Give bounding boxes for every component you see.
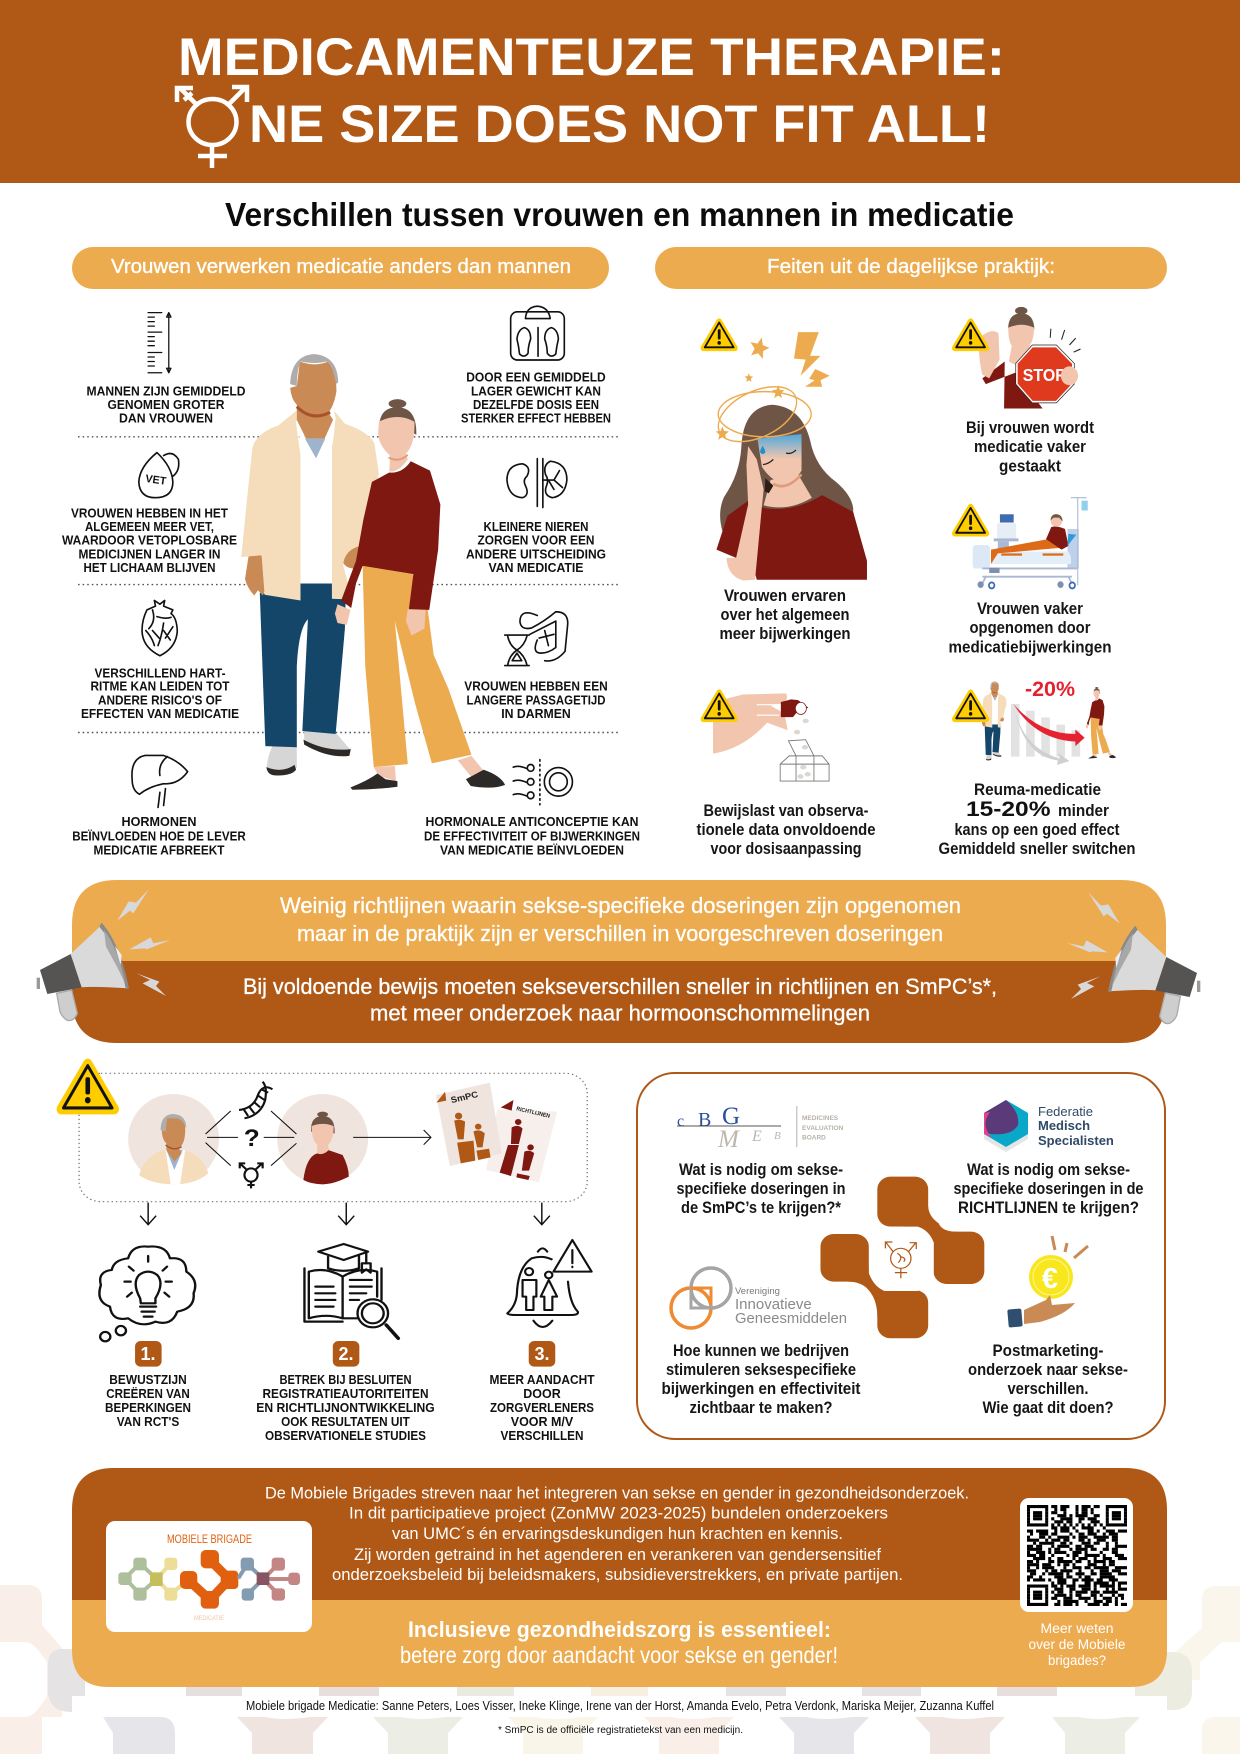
text: evidence: voor dosisaanpassing xyxy=(710,840,862,858)
text: side effects: Vrouwen ervaren xyxy=(724,587,846,605)
text: weight: DOOR EEN GEMIDDELD xyxy=(466,369,606,384)
text: question SmPC: Wat is nodig om sekse- xyxy=(679,1160,843,1179)
text: kidneys: ZORGEN VOOR EEN xyxy=(478,532,594,547)
text: kidneys: KLEINERE NIEREN xyxy=(484,519,588,534)
warning icons xyxy=(703,321,986,719)
header banner xyxy=(0,0,1240,183)
text: stopped: gestaakt xyxy=(999,457,1061,475)
text: step 2: REGISTRATIEAUTORITEITEN xyxy=(262,1386,428,1401)
text: step 2: OBSERVATIONELE STUDIES xyxy=(265,1428,426,1443)
text: admitted: Vrouwen vaker xyxy=(977,600,1084,618)
text: reuma: kans op een goed effect xyxy=(954,821,1120,839)
panel: stakeholders xyxy=(637,1073,1165,1439)
text: QR caption: Meer weten xyxy=(1040,1620,1114,1636)
badge numbers: 2. xyxy=(338,1344,354,1364)
panel: left column illustrations xyxy=(132,306,572,807)
illustration: hand dropping pills xyxy=(713,693,829,781)
text: stopped: Bij vrouwen wordt xyxy=(966,419,1094,437)
text: step 1: BEWUSTZIJN xyxy=(109,1372,187,1387)
icon: heart xyxy=(142,600,177,656)
text: question companies: zichtbaar te maken? xyxy=(690,1398,832,1417)
text: intro: onderzoeksbeleid bij beleidsmakers, subsidieverstrekkers, en private partijen. xyxy=(332,1565,903,1584)
avatar: man xyxy=(128,1094,219,1184)
text: contraception: DE EFFECTIVITEIT OF BIJWERKINGEN xyxy=(424,828,640,844)
QR code xyxy=(1020,1498,1133,1612)
text: weight xyxy=(461,369,611,426)
text: height xyxy=(86,383,246,426)
panel: right column illustrations xyxy=(711,307,1116,781)
text: QR caption: over de Mobiele xyxy=(1028,1636,1126,1652)
text: kidneys: VAN MEDICATIE xyxy=(488,560,584,575)
dotted dividers xyxy=(78,437,620,732)
text: question companies: bijwerkingen en effectiviteit xyxy=(662,1379,861,1398)
text: liver: MEDICATIE AFBREEKT xyxy=(94,842,225,858)
text: admitted: opgenomen door xyxy=(970,619,1091,637)
icon: fat drop: VET xyxy=(145,473,167,488)
icon: gender symbol xyxy=(177,87,247,168)
text: step 3: MEER AANDACHT xyxy=(490,1372,595,1387)
text: admitted xyxy=(948,600,1112,656)
text: question postmarketing: Wie gaat dit doen? xyxy=(982,1398,1114,1417)
logo: Federatie Medisch Specialisten: Specialisten xyxy=(1038,1133,1114,1148)
text: contraception: VAN MEDICATIE BEÏNVLOEDEN xyxy=(440,842,624,858)
text: question guidelines xyxy=(954,1160,1144,1217)
text: height: DAN VROUWEN xyxy=(119,410,213,426)
text: heart: ANDERE RISICO'S OF xyxy=(98,692,222,707)
text: intro xyxy=(265,1484,969,1584)
text: kidneys: ANDERE UITSCHEIDING xyxy=(466,546,606,561)
icon: thought bubble xyxy=(99,1246,195,1341)
docs: SmPC and guidelines: RICHTLIJNEN xyxy=(515,1106,550,1120)
icon: megaphone right xyxy=(1067,892,1200,1024)
text: question guidelines: specifieke doseringen in de xyxy=(954,1179,1144,1198)
icon: kidneys xyxy=(507,459,567,508)
text: question guidelines: RICHTLIJNEN te krijgen? xyxy=(958,1198,1139,1217)
white footer strip xyxy=(72,1696,1167,1717)
text: step 3: ZORGVERLENERS xyxy=(490,1400,594,1415)
illustration: stop sign woman xyxy=(979,307,1080,409)
text: fat: WAARDOOR VETOPLOSBARE xyxy=(62,532,237,547)
text: side effects: meer bijwerkingen xyxy=(720,625,850,643)
logo: CBG MEB: B xyxy=(698,1109,711,1131)
dotted frame xyxy=(79,1073,587,1202)
illustration: stop sign woman: STOP xyxy=(1023,365,1066,385)
text: fat: ALGEMEEN MEER VET, xyxy=(85,519,214,534)
connector lines xyxy=(206,1111,431,1166)
figure: woman xyxy=(335,399,505,790)
text: guideline bottom xyxy=(243,974,997,1026)
text: step 2: BETREK BIJ BESLUITEN xyxy=(280,1372,412,1387)
pill heading: right: Feiten uit de dagelijkse praktijk: xyxy=(767,256,1055,278)
icon: coin in hand: € xyxy=(1042,1263,1058,1295)
logo: CBG MEB: B xyxy=(774,1130,781,1142)
panel: guideline banner xyxy=(72,880,1166,1043)
logo: CBG MEB xyxy=(677,1103,844,1153)
text: intro: Zij worden getraind in het agenderen en verankeren van gendersensitief xyxy=(354,1545,881,1564)
logo: Federatie Medisch Specialisten: Federatie xyxy=(1038,1104,1093,1119)
text: reuma: Gemiddeld sneller switchen xyxy=(938,840,1136,858)
text: step 2: OOK RESULTATEN UIT xyxy=(281,1414,410,1429)
main heading: Verschillen tussen vrouwen en mannen in medicatie xyxy=(225,196,1014,233)
arrows down xyxy=(140,1203,550,1225)
text: question SmPC xyxy=(676,1160,846,1217)
text: intestines: VROUWEN HEBBEN EEN xyxy=(464,678,608,693)
text: intro: De Mobiele Brigades streven naar het integreren van sekse en gender in gezondheidsonderzoek. xyxy=(265,1484,969,1503)
logo: Federatie Medisch Specialisten: Medisch xyxy=(1038,1118,1090,1133)
text: evidence: tionele data onvoldoende xyxy=(696,821,876,839)
logo: Federatie Medisch Specialisten xyxy=(984,1100,1114,1152)
text: heart: RITME KAN LEIDEN TOT xyxy=(90,678,230,693)
text: step 2: EN RICHTLIJNONTWIKKELING xyxy=(256,1400,435,1415)
text: question guidelines: Wat is nodig om sekse- xyxy=(967,1160,1130,1179)
text: step 1: CREËREN VAN xyxy=(106,1386,190,1401)
text: side effects: over het algemeen xyxy=(720,606,850,624)
text: conclusion: betere zorg door aandacht voor sekse en gender! xyxy=(400,1642,838,1668)
text: contraception xyxy=(424,814,640,858)
icon: fat drop xyxy=(139,453,179,498)
text: conclusion: Inclusieve gezondheidszorg is essentieel: xyxy=(408,1617,831,1642)
text: side effects xyxy=(720,587,850,643)
text: reuma xyxy=(938,781,1136,858)
text: step 3: VERSCHILLEN xyxy=(500,1428,584,1443)
text: liver: HORMONEN xyxy=(122,814,196,829)
logo card: Mobiele Brigade xyxy=(106,1521,312,1632)
text: weight: DEZELFDE DOSIS EEN xyxy=(473,397,599,412)
badge numbers: 3. xyxy=(534,1344,550,1364)
text: question postmarketing: onderzoek naar sekse- xyxy=(968,1360,1128,1379)
logo: CBG MEB: M xyxy=(717,1126,740,1153)
text: QR caption xyxy=(1028,1620,1126,1668)
warning icon large xyxy=(61,1064,114,1109)
icon: book and magnifier xyxy=(304,1244,398,1338)
icon: liver xyxy=(132,755,188,807)
text: liver: BEÏNVLOEDEN HOE DE LEVER xyxy=(72,828,246,844)
text: intro: In dit participatieve project (ZonMW 2023-2025) bundelen onderzoekers xyxy=(349,1504,888,1523)
icon: DNA xyxy=(239,1082,272,1118)
text: step 1: BEPERKINGEN xyxy=(105,1400,191,1415)
icon: question mark: ? xyxy=(244,1125,260,1152)
text: step 3: DOOR xyxy=(523,1386,561,1401)
pill heading: left: Vrouwen verwerken medicatie anders dan mannen xyxy=(111,256,571,278)
text: step 3 xyxy=(490,1372,595,1443)
icon: scale xyxy=(511,306,564,360)
text: question companies xyxy=(662,1341,861,1417)
logo: CBG MEB: c xyxy=(677,1113,684,1130)
logo: CBG MEB: G xyxy=(722,1103,740,1130)
logo: CBG MEB: MEDICINES xyxy=(802,1115,839,1122)
badge numbers xyxy=(140,1344,550,1364)
icon: megaphone left xyxy=(37,889,170,1021)
text: heart: VERSCHILLEND HART- xyxy=(94,666,226,681)
title line 2: NE SIZE DOES NOT FIT ALL! xyxy=(249,95,990,154)
avatar: woman xyxy=(277,1094,368,1184)
text: question postmarketing: verschillen. xyxy=(1008,1379,1088,1398)
text: stopped xyxy=(966,419,1094,475)
icon: coin in hand xyxy=(1007,1236,1088,1328)
text: reuma: Reuma-medicatie xyxy=(974,781,1101,799)
text: question postmarketing xyxy=(968,1341,1128,1417)
illustration: dizzy woman xyxy=(711,332,867,581)
text: guideline bottom: met meer onderzoek naar hormoonschommelingen xyxy=(370,1001,870,1026)
logo: CBG MEB: EVALUATION xyxy=(802,1125,844,1132)
illustration: reuma chart xyxy=(981,681,1116,765)
illustration: hospital bed xyxy=(973,498,1088,588)
text: step 2 xyxy=(256,1372,435,1443)
text: QR caption: brigades? xyxy=(1048,1652,1106,1668)
icon: alarm bell xyxy=(507,1240,592,1327)
text: conclusion xyxy=(400,1617,838,1668)
text: weight: STERKER EFFECT HEBBEN xyxy=(461,410,611,426)
text: question companies: stimuleren seksespecifieke xyxy=(666,1360,856,1379)
panel: awareness flow xyxy=(61,1064,592,1367)
icon: height ruler xyxy=(148,313,171,373)
text: height: GENOMEN GROTER xyxy=(108,397,225,412)
icon: central cross xyxy=(820,1177,984,1338)
title line 1: MEDICAMENTEUZE THERAPIE: xyxy=(178,28,1005,87)
text: guideline top: Weinig richtlijnen waarin sekse-specifieke doseringen zijn opgenomen xyxy=(280,893,961,918)
logo: CBG MEB: BOARD xyxy=(802,1134,826,1142)
text: step 1 xyxy=(105,1372,191,1429)
logo: Innovatieve Geneesmiddelen: Vereniging xyxy=(735,1286,780,1297)
text: guideline top: maar in de praktijk zijn er verschillen in voorgeschreven doseringen xyxy=(297,921,943,946)
icon: gender xyxy=(240,1163,263,1188)
footnote: * SmPC is de officiële registratietekst van een medicijn. xyxy=(498,1725,743,1736)
text: evidence: Bewijslast van observa- xyxy=(704,802,868,820)
text: guideline bottom: Bij voldoende bewijs moeten sekseverschillen sneller in richtlijnen en SmPC’s*, xyxy=(243,974,997,999)
text: intestines: IN DARMEN xyxy=(501,706,571,721)
logo: Innovatieve Geneesmiddelen: Geneesmiddelen xyxy=(735,1310,847,1327)
text: question companies: Hoe kunnen we bedrijven xyxy=(673,1341,849,1360)
icon: intestines and hourglass xyxy=(505,612,568,666)
text: fat: MEDICIJNEN LANGER IN xyxy=(78,546,220,561)
credits: Mobiele brigade Medicatie: Sanne Peters, Loes Visser, Ineke Klinge, Irene van der Horst, Amanda Evelo, Petra Verdonk, Mariska Meijer, Zuzanna Kuffel xyxy=(246,1699,994,1713)
text: fat: HET LICHAAM BLIJVEN xyxy=(84,560,216,575)
docs: SmPC and guidelines: SmPC xyxy=(450,1089,480,1105)
text: height: MANNEN ZIJN GEMIDDELD xyxy=(86,383,246,398)
text: evidence xyxy=(696,802,876,858)
text: step 1: VAN RCT'S xyxy=(117,1414,180,1429)
figure: man xyxy=(241,354,379,776)
text: -20 percent: -20% xyxy=(1025,678,1075,701)
text: guideline top xyxy=(280,893,961,946)
logo card: Mobiele Brigade: MOBIELE BRIGADE xyxy=(167,1534,252,1546)
badge numbers: 1. xyxy=(140,1344,156,1364)
text: kidneys xyxy=(466,519,606,575)
badges xyxy=(135,1341,555,1367)
text: intro: van UMC´s én ervaringsdeskundigen hun krachten en kennis. xyxy=(392,1524,843,1543)
text: question postmarketing: Postmarketing- xyxy=(992,1341,1104,1360)
text: question SmPC: de SmPC’s te krijgen?* xyxy=(681,1198,841,1217)
text: step 3: VOOR M/V xyxy=(511,1414,574,1429)
text: stopped: medicatie vaker xyxy=(974,438,1087,456)
text: intestines xyxy=(464,678,608,721)
docs: SmPC and guidelines xyxy=(436,1083,557,1182)
text: intestines: LANGERE PASSAGETIJD xyxy=(466,692,606,707)
logo: CBG MEB: E xyxy=(751,1128,762,1145)
text: contraception: HORMONALE ANTICONCEPTIE KAN xyxy=(426,814,638,829)
text: question SmPC: specifieke doseringen in xyxy=(676,1179,846,1198)
logo: Innovatieve Geneesmiddelen: Innovatieve xyxy=(735,1296,812,1313)
panel: mobile brigades xyxy=(72,1468,1167,1687)
text: heart: EFFECTEN VAN MEDICATIE xyxy=(81,706,239,721)
text: admitted: medicatiebijwerkingen xyxy=(948,638,1112,656)
icon: hormones xyxy=(513,760,572,805)
logo card: Mobiele Brigade: MEDICATIE xyxy=(194,1616,224,1622)
text: weight: LAGER GEWICHT KAN xyxy=(471,383,601,398)
text: heart xyxy=(81,666,239,721)
text: reuma: 15-20% xyxy=(966,798,1051,821)
text: liver xyxy=(72,814,246,858)
pill heading: right xyxy=(655,247,1167,289)
text: fat: VROUWEN HEBBEN IN HET xyxy=(71,505,228,520)
logo: Innovatieve Geneesmiddelen xyxy=(671,1268,847,1328)
pill heading: left xyxy=(72,247,609,289)
text: reuma: minder xyxy=(1058,802,1110,820)
text: fat xyxy=(62,505,237,575)
